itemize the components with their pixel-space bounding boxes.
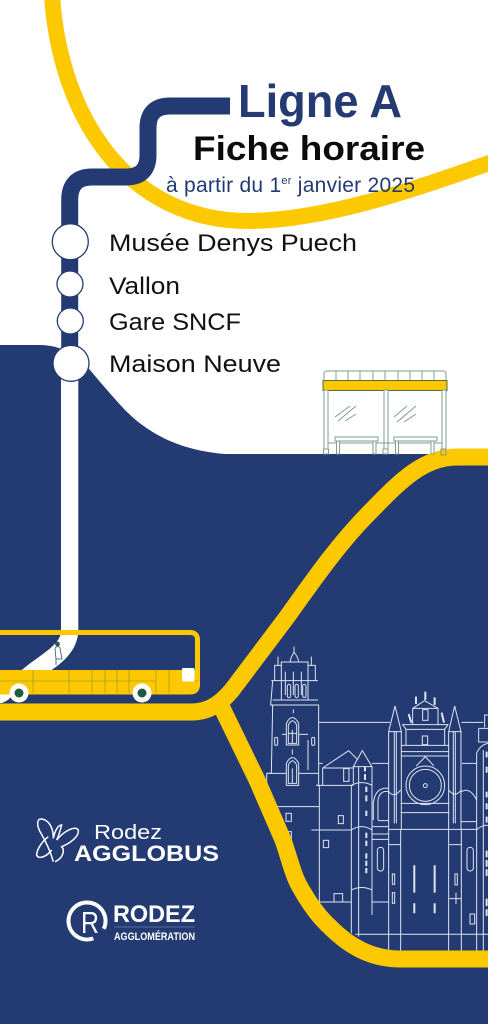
logo: Rodez Agglomération: [69, 901, 195, 943]
logo: Rodez Agglobus: AGGLOBUS: [74, 841, 219, 866]
stop names: [109, 230, 357, 378]
logo: Rodez Agglomération: AGGLOMÉRATION: [114, 930, 195, 943]
right tower: [477, 715, 488, 957]
stop names: Vallon: [109, 273, 180, 300]
title: Ligne A: [238, 75, 402, 127]
validity date: janvier 2025: [292, 174, 415, 197]
bell tower: [267, 647, 319, 853]
yellow arc behind the title: [52, 0, 488, 221]
validity date: er: [281, 175, 292, 187]
nave and side tower: [311, 722, 483, 937]
icon: bus: [0, 632, 198, 702]
icon: R roundel: R: [81, 905, 99, 940]
stop names: Maison Neuve: [109, 351, 281, 378]
yellow road with two branches: [0, 457, 488, 959]
subtitle: Fiche horaire: [193, 130, 425, 168]
stop markers: [52, 224, 89, 381]
logo: Rodez Agglomération: RODEZ: [113, 901, 195, 928]
logo: Rodez Agglobus: Rodez: [94, 822, 162, 844]
blue route line: [70, 106, 230, 365]
bus wheels: [10, 684, 152, 702]
illustration: Rodez cathedral outline: [267, 647, 488, 957]
stop names: Musée Denys Puech: [109, 230, 357, 257]
stop names: Gare SNCF: [109, 309, 241, 336]
icon: bus shelter: [323, 371, 447, 455]
icon: butterfly: [37, 819, 78, 862]
navy landscape background: [0, 345, 488, 1024]
white route line: [0, 370, 78, 703]
main facade: [355, 692, 488, 957]
validity date: à partir du 1: [166, 174, 281, 197]
logo: Rodez Agglobus: [37, 819, 219, 866]
icon: passenger: [55, 642, 62, 665]
